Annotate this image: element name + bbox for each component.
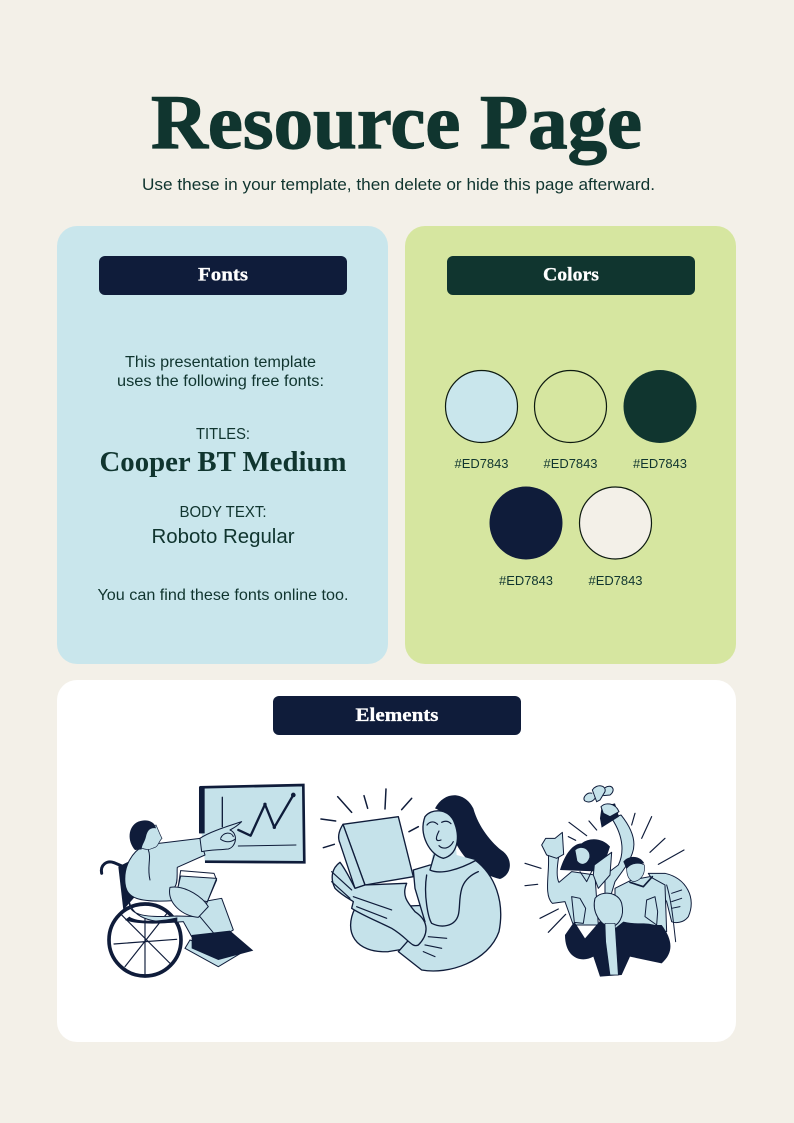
swatch: light blue	[446, 370, 518, 471]
swatch: dark green	[624, 370, 696, 471]
body font sample: Roboto Regular	[152, 525, 295, 548]
heading: fonts: Fonts	[198, 264, 248, 286]
illustration: woman holding a box	[321, 789, 510, 971]
titles font sample	[100, 426, 346, 478]
panel: elements	[57, 680, 736, 1042]
heading: colors	[447, 256, 695, 295]
fonts intro text	[117, 354, 324, 390]
subtitle: Use these in your template, then delete or hide this page afterward.	[142, 176, 655, 194]
swatch: navy	[490, 486, 562, 588]
swatch: lime: #ED7843	[544, 457, 598, 471]
title: Resource Page	[151, 79, 642, 165]
titles font sample: Cooper BT Medium	[100, 446, 346, 478]
heading: elements	[273, 696, 521, 735]
fonts intro text: This presentation template	[125, 354, 316, 371]
titles font sample: TITLES:	[196, 426, 250, 443]
heading: fonts	[99, 256, 347, 295]
fonts intro text: uses the following free fonts:	[117, 373, 324, 390]
panel: colors	[405, 226, 736, 664]
swatch: lime	[534, 370, 606, 471]
heading: colors: Colors	[543, 264, 599, 286]
fonts footer text: You can find these fonts online too.	[98, 587, 348, 604]
body font sample	[152, 504, 295, 548]
illustration: cheering team	[525, 786, 691, 977]
swatch: dark green: #ED7843	[633, 457, 687, 471]
swatch: light blue: #ED7843	[454, 457, 509, 471]
swatch: cream	[580, 487, 652, 588]
illustration: presenter in wheelchair	[101, 785, 304, 976]
swatch: cream: #ED7843	[588, 574, 643, 588]
body font sample: BODY TEXT:	[180, 504, 266, 521]
heading: elements: Elements	[356, 705, 438, 726]
panel: fonts	[57, 226, 388, 664]
swatch: navy: #ED7843	[499, 574, 553, 588]
